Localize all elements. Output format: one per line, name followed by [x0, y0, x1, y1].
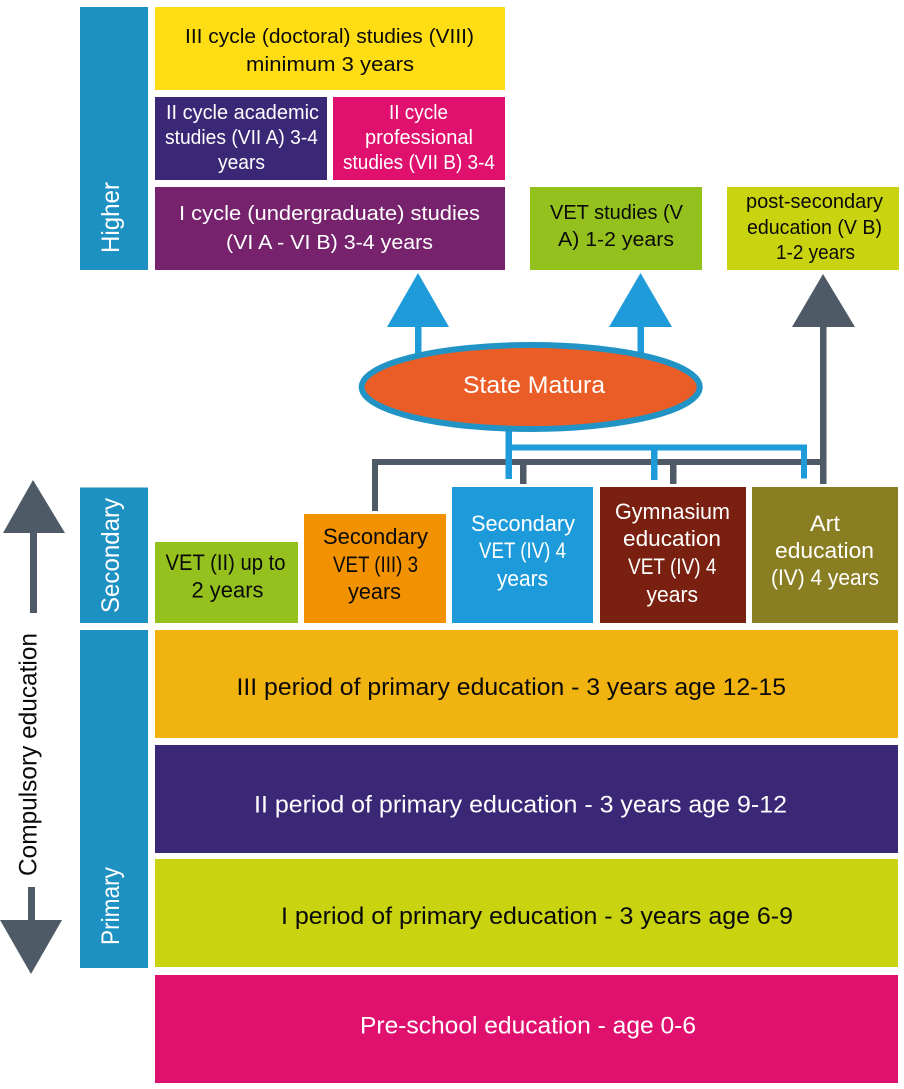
panel: II cycle academic [155, 97, 327, 180]
panel: Gymnasium education [600, 487, 746, 623]
arrow: up [3, 480, 65, 613]
panel: III period of primary: III period of primary education - 3 years age 12-15 [236, 674, 786, 701]
panel: I cycle undergraduate: I cycle (undergraduate) studies [179, 203, 480, 225]
State Matura ellipse: State Matura [463, 372, 606, 399]
panel: Secondary VET IV: Secondary [471, 511, 575, 536]
panel: pre-school: Pre-school education - age 0-6 [360, 1012, 696, 1040]
label: compulsory education: Compulsory education [14, 633, 42, 876]
panel: VET studies: A) 1-2 years [558, 229, 674, 251]
panel: I period of primary: I period of primary education - 3 years age 6-9 [281, 903, 793, 930]
panel: II cycle academic: II cycle academic [166, 102, 319, 124]
panel: Gymnasium education: VET (IV) 4 [628, 554, 716, 579]
panel: higher education label: Higher [97, 182, 125, 253]
panel: II cycle academic: studies (VII A) 3-4 [165, 127, 318, 149]
panel: II cycle professional: studies (VII B) 3-4 [343, 152, 495, 174]
panel: Art education [752, 487, 898, 623]
panel: secondary label: Secondary [97, 498, 125, 613]
panel: III cycle doctoral [155, 7, 505, 90]
panel: Gymnasium education: Gymnasium [615, 499, 730, 524]
panel: II cycle professional: II cycle [389, 102, 448, 124]
panel: II period of primary [155, 745, 898, 853]
panel: Gymnasium education: education [623, 526, 721, 551]
panel: Art education: Art [810, 511, 840, 536]
panel: primary label [80, 630, 148, 968]
panel: higher education label [80, 7, 148, 270]
panel: II cycle professional [333, 97, 505, 180]
arrow: secondary to post-secondary [792, 274, 855, 484]
arrow: matura to VET studies [609, 273, 672, 355]
compulsory education indicator [0, 480, 65, 974]
panel: Art education: (IV) 4 years [771, 565, 879, 590]
panel: III cycle doctoral: minimum 3 years [246, 54, 414, 76]
panel: Secondary VET IV [452, 487, 593, 623]
panel: Secondary VET IV: VET (IV) 4 [479, 538, 566, 563]
panel: VET studies [530, 187, 702, 270]
panel: post-secondary education [727, 187, 899, 270]
arrow: matura to undergraduate [387, 273, 449, 355]
panel: VET II [155, 542, 298, 623]
panel: Gymnasium education: years [646, 582, 698, 607]
panel: pre-school [155, 975, 898, 1083]
panel: III cycle doctoral: III cycle (doctoral) studies (VIII) [185, 26, 474, 48]
panel: II period of primary: II period of primary education - 3 years age 9-12 [254, 792, 787, 818]
panel: Secondary VET III: Secondary [323, 524, 428, 549]
connector: grey secondary lines [372, 459, 826, 511]
panel: post-secondary education: post-secondary [746, 191, 883, 213]
panel: I cycle undergraduate [155, 187, 505, 270]
panel: Secondary VET III: VET (III) 3 [333, 552, 418, 577]
panel: I cycle undergraduate: (VI A - VI B) 3-4 years [226, 232, 433, 254]
panel: VET studies: VET studies (V [550, 202, 684, 224]
panel: Art education: education [775, 538, 874, 563]
panel: post-secondary education: education (V B) [747, 217, 882, 239]
panel: primary label: Primary [97, 867, 125, 945]
State Matura ellipse [362, 345, 700, 429]
panel: Secondary VET IV: years [497, 566, 548, 591]
panel: I period of primary [155, 859, 898, 967]
panel: VET II: VET (II) up to [166, 550, 286, 575]
panel: post-secondary education: 1-2 years [776, 242, 855, 264]
panel: II cycle academic: years [218, 152, 265, 174]
arrow: down [0, 887, 62, 974]
panel: II cycle professional: professional [365, 127, 473, 149]
connector: blue matura lines [506, 428, 807, 480]
panel: VET II: 2 years [192, 578, 264, 602]
panel: III period of primary [155, 630, 898, 738]
panel: Secondary VET III [304, 514, 446, 623]
panel: Secondary VET III: years [348, 579, 401, 604]
panel: secondary label [80, 488, 148, 623]
